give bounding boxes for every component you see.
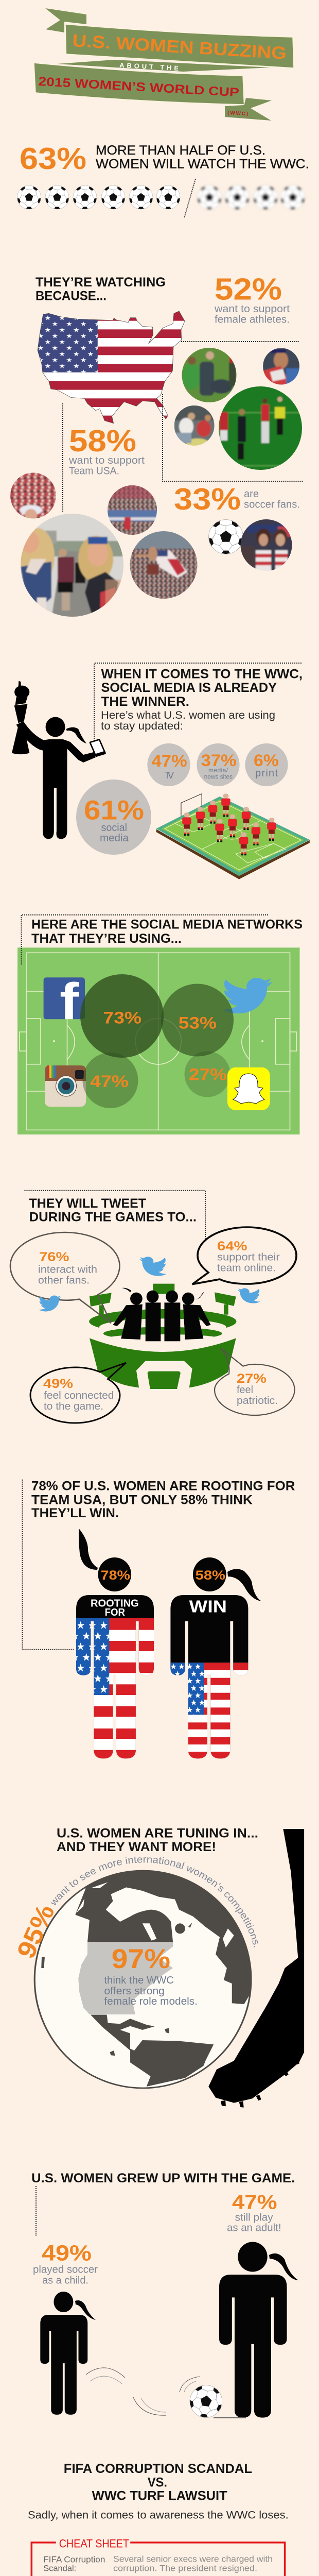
heading: FIFA scandal vs turf lawsuit	[64, 2462, 252, 2503]
speech bubble: 76%: other fans.	[38, 1275, 90, 1286]
stat circle: 61% social media: social	[101, 822, 127, 834]
stat 49% played as child	[33, 2241, 98, 2286]
cheat sheet title: CHEAT SHEET	[59, 2537, 129, 2550]
globe	[34, 1869, 253, 2088]
heading: tuning in: AND THEY WANT MORE!	[57, 1840, 216, 1854]
figure: think they'll win 58%: 58%	[196, 1568, 225, 1583]
icon: Twitter bird left	[39, 1296, 61, 1311]
stat 97% role models	[104, 1944, 198, 2007]
heading: FIFA scandal vs turf lawsuit: FIFA CORRUPTION SCANDAL	[64, 2462, 252, 2476]
stat 52% female athletes: female athletes.	[215, 314, 290, 326]
definition: FIFA corruption scandal: Several senior execs were charged with	[113, 2554, 273, 2564]
icon: Twitter bird	[222, 978, 272, 1013]
term: FIFA corruption scandal: FIFA Corruption	[43, 2554, 105, 2564]
heading: social media is already the winner: THE WINNER.	[101, 694, 189, 709]
photo: tackle	[174, 405, 215, 448]
subheading: WWC loses: Sadly, when it comes to awareness the WWC loses.	[28, 2509, 289, 2521]
stat 47% still play: still play	[235, 2212, 273, 2224]
section: tuning in and want more	[11, 1826, 305, 2108]
figure: rooting for 78%: ROOTING	[91, 1598, 139, 1609]
US flag map	[37, 310, 186, 425]
circle: Snapchat 27%: 27%	[189, 1065, 227, 1084]
heading: 78% rooting, 58% think they'll win: TEAM USA, BUT ONLY 58% THINK	[31, 1493, 253, 1507]
figure: child	[40, 2292, 96, 2415]
heading: social media is already the winner	[101, 667, 303, 709]
circle: Twitter 53%: 53%	[179, 1014, 217, 1032]
stat circle: 6% print: 6%	[254, 751, 279, 770]
icon: Instagram	[45, 1065, 86, 1107]
stat 33% soccer fans: are	[244, 488, 259, 500]
circle: Facebook 73%: 73%	[103, 1009, 141, 1027]
icon: soccer ball	[207, 516, 245, 554]
figure: rooting for 78%: FOR	[105, 1607, 126, 1618]
heading: 2015 Women's World Cup: 2015 WOMEN’S WORLD CUP	[38, 75, 240, 100]
definition: FIFA corruption scandal: corruption. The president resigned.	[113, 2564, 257, 2573]
speech bubble: 49%	[30, 1363, 126, 1423]
term: FIFA corruption scandal	[43, 2554, 105, 2573]
motion lines	[86, 2368, 200, 2415]
stadium with fans	[81, 1284, 244, 1389]
heading: 78% rooting, 58% think they'll win: 78% OF U.S. WOMEN ARE ROOTING FOR	[31, 1479, 295, 1494]
speech bubble: 64%	[192, 1227, 296, 1284]
heading: social media networks: HERE ARE THE SOCIAL MEDIA NETWORKS	[31, 918, 303, 932]
heading: FIFA scandal vs turf lawsuit: WWC TURF LAWSUIT	[92, 2489, 227, 2503]
stat circle: 61% social media	[76, 779, 151, 855]
heading: 78% rooting, 58% think they'll win	[31, 1479, 295, 1520]
soccer pitch panel	[17, 947, 299, 1134]
soccer ball row: six sharp	[16, 183, 182, 209]
heading: U.S. Women Buzzing: U.S. WOMEN BUZZING	[72, 31, 287, 63]
photo: player celebrating	[262, 348, 300, 386]
stat 47% still play: 47%	[232, 2191, 277, 2213]
stat 97% role models: offers strong	[104, 1986, 165, 1997]
title banner	[34, 8, 294, 121]
speech bubble: 49%: 49%	[43, 1377, 73, 1391]
curved label: want to see more international women's competitions: want to see more international women’s competitions.	[50, 1857, 258, 1947]
photo: fans in crowd	[10, 473, 56, 518]
term: FIFA corruption scandal: Scandal:	[43, 2564, 76, 2573]
subheading: what women are using: Here’s what U.S. women are using	[101, 709, 275, 721]
heading: they will tweet	[29, 1196, 197, 1225]
label: WWC: (WWC)	[227, 110, 248, 117]
panel: cheat sheet	[31, 2537, 285, 2576]
speech bubble: 27%: 27%	[237, 1371, 267, 1386]
stat circle: 37% media news sites	[197, 743, 240, 786]
heading: social media networks: THAT THEY’RE USING...	[31, 931, 182, 946]
speech bubble: 76%: interact with	[38, 1264, 97, 1276]
section: social media networks	[17, 915, 303, 1134]
stat circle: 47% TV: 47%	[152, 752, 187, 770]
photo: fan waving flag	[130, 531, 198, 599]
stat 33% soccer fans	[174, 482, 300, 516]
speech bubble: 49%: to the game.	[44, 1401, 103, 1412]
section: they're watching because	[8, 273, 305, 619]
stat 58% team USA	[68, 424, 145, 477]
stat 49% played as child: played soccer	[33, 2264, 98, 2276]
stat 33% soccer fans: soccer fans.	[244, 499, 300, 511]
isometric soccer field with players	[156, 793, 310, 879]
stat 49% played as child: as a child.	[42, 2275, 88, 2286]
section: they will tweet during the games	[10, 1191, 296, 1423]
figure: rooting for 78%: 78%	[101, 1568, 130, 1583]
circle: Instagram 47%: 47%	[90, 1072, 129, 1091]
stat 58% team USA: Team USA.	[69, 466, 119, 477]
circle: Twitter 53%	[161, 984, 234, 1056]
stat 33% soccer fans: 33%	[174, 482, 241, 516]
soccer ball row: four blurred	[196, 183, 307, 209]
heading: tuning in: U.S. WOMEN ARE TUNING IN...	[57, 1826, 258, 1841]
stat circle: 37% media news sites: news sites	[204, 773, 233, 781]
speech bubble: 76%: 76%	[39, 1250, 69, 1264]
stat 58% team USA: want to support	[68, 455, 145, 466]
heading: social media is already the winner: WHEN IT COMES TO THE WWC,	[101, 667, 303, 682]
speech bubble: 49%: feel connected	[44, 1390, 114, 1401]
stat circle: 47% TV	[147, 743, 190, 786]
photo: two women with flag	[241, 519, 292, 571]
section: 63 percent will watch	[16, 142, 309, 218]
stat 58% team USA: 58%	[69, 424, 136, 458]
icon: soccer ball at foot	[186, 2380, 246, 2420]
circle: Instagram 47%	[82, 1053, 138, 1108]
section: grew up with the game	[31, 2171, 298, 2420]
stat circle: 37% media news sites: media/	[208, 767, 228, 774]
heading: tuning in	[57, 1826, 258, 1854]
stat 52% female athletes: 52%	[215, 273, 282, 307]
icon: leg with cleat kicking globe	[208, 1829, 304, 2108]
stat circle: 6% print: print	[255, 768, 278, 779]
definition: FIFA corruption scandal	[113, 2554, 273, 2573]
figure: think they'll win 58%	[170, 1557, 261, 1759]
figure: think they'll win 58%: WIN	[189, 1597, 227, 1616]
icon: Twitter bird right	[238, 1288, 260, 1303]
stat circle: 37% media news sites: 37%	[201, 751, 237, 770]
icon: Snapchat	[227, 1067, 270, 1110]
circle: Snapchat 27%	[184, 1051, 231, 1097]
heading: more than half	[96, 143, 309, 172]
stat 97% role models: female role models.	[104, 1996, 198, 2007]
figure: adult	[219, 2242, 298, 2418]
section: FIFA corruption scandal vs turf lawsuit	[28, 2462, 289, 2576]
stat circle: 47% TV: TV	[165, 770, 174, 781]
heading: more than half: MORE THAN HALF OF U.S.	[96, 143, 265, 158]
photo: match action on green pitch	[219, 386, 302, 470]
section: social media is the winner	[12, 663, 310, 879]
subheading: about the: ABOUT THE	[119, 61, 179, 72]
speech bubble: 27%	[215, 1348, 295, 1415]
stat circle: 6% print	[245, 743, 288, 786]
heading: they're watching because	[36, 275, 166, 303]
stat 47% still play	[227, 2191, 281, 2234]
heading: they will tweet: THEY WILL TWEET	[29, 1196, 146, 1211]
photo: stadium crowd with flags	[108, 485, 157, 535]
stat 97% role models: 97%	[112, 1944, 170, 1974]
heading: more than half: WOMEN WILL WATCH THE WWC.	[96, 157, 309, 172]
stat 52% female athletes	[214, 273, 290, 326]
heading: social media networks	[31, 918, 303, 946]
stat 47% still play: as an adult!	[227, 2223, 281, 2234]
subheading: what women are using	[101, 709, 275, 732]
icon: Twitter bird centre	[139, 1257, 167, 1276]
icon: Facebook	[44, 973, 85, 1030]
stat circle: 61% social media: 61%	[84, 795, 144, 826]
stat 97% role models: think the WWC	[104, 1975, 174, 1986]
icon: woman with trophy and phone	[12, 681, 107, 839]
figure: rooting for 78%	[76, 1529, 154, 1759]
speech bubble: 64%: support their	[217, 1252, 280, 1263]
heading: social media is already the winner: SOCIAL MEDIA IS ALREADY	[101, 681, 277, 695]
speech bubble: 27%: feel	[237, 1384, 253, 1396]
stat 95% rotated: 95%	[11, 1900, 60, 1962]
subheading: what women are using: to stay updated:	[101, 720, 183, 732]
section: rooting for team USA	[23, 1479, 295, 1759]
heading: they will tweet: DURING THE GAMES TO...	[29, 1210, 197, 1225]
heading: grew up with the game: U.S. WOMEN GREW UP WITH THE GAME.	[31, 2171, 295, 2185]
circle: Facebook 73%	[80, 974, 164, 1058]
heading: FIFA scandal vs turf lawsuit: VS.	[148, 2476, 167, 2490]
speech bubble: 64%: 64%	[217, 1239, 247, 1253]
heading: 78% rooting, 58% think they'll win: THEY’LL WIN.	[31, 1506, 119, 1520]
speech bubble: 27%: patriotic.	[237, 1395, 278, 1406]
speech bubble: 76%	[10, 1232, 119, 1323]
photo: two fans in flag scarves	[18, 511, 126, 619]
photo: players on pitch	[182, 348, 237, 402]
icon: Facebook: f	[60, 973, 79, 1030]
heading: they're watching because: THEY’RE WATCHING	[36, 275, 166, 290]
stat circle: 61% social media: media	[100, 833, 129, 844]
stat 63%: 63%	[20, 142, 86, 176]
stat 52% female athletes: want to support	[214, 303, 290, 315]
heading: they're watching because: BECAUSE...	[36, 289, 107, 303]
stat 49% played as child: 49%	[42, 2241, 92, 2266]
speech bubble: 64%: team online.	[217, 1262, 276, 1274]
